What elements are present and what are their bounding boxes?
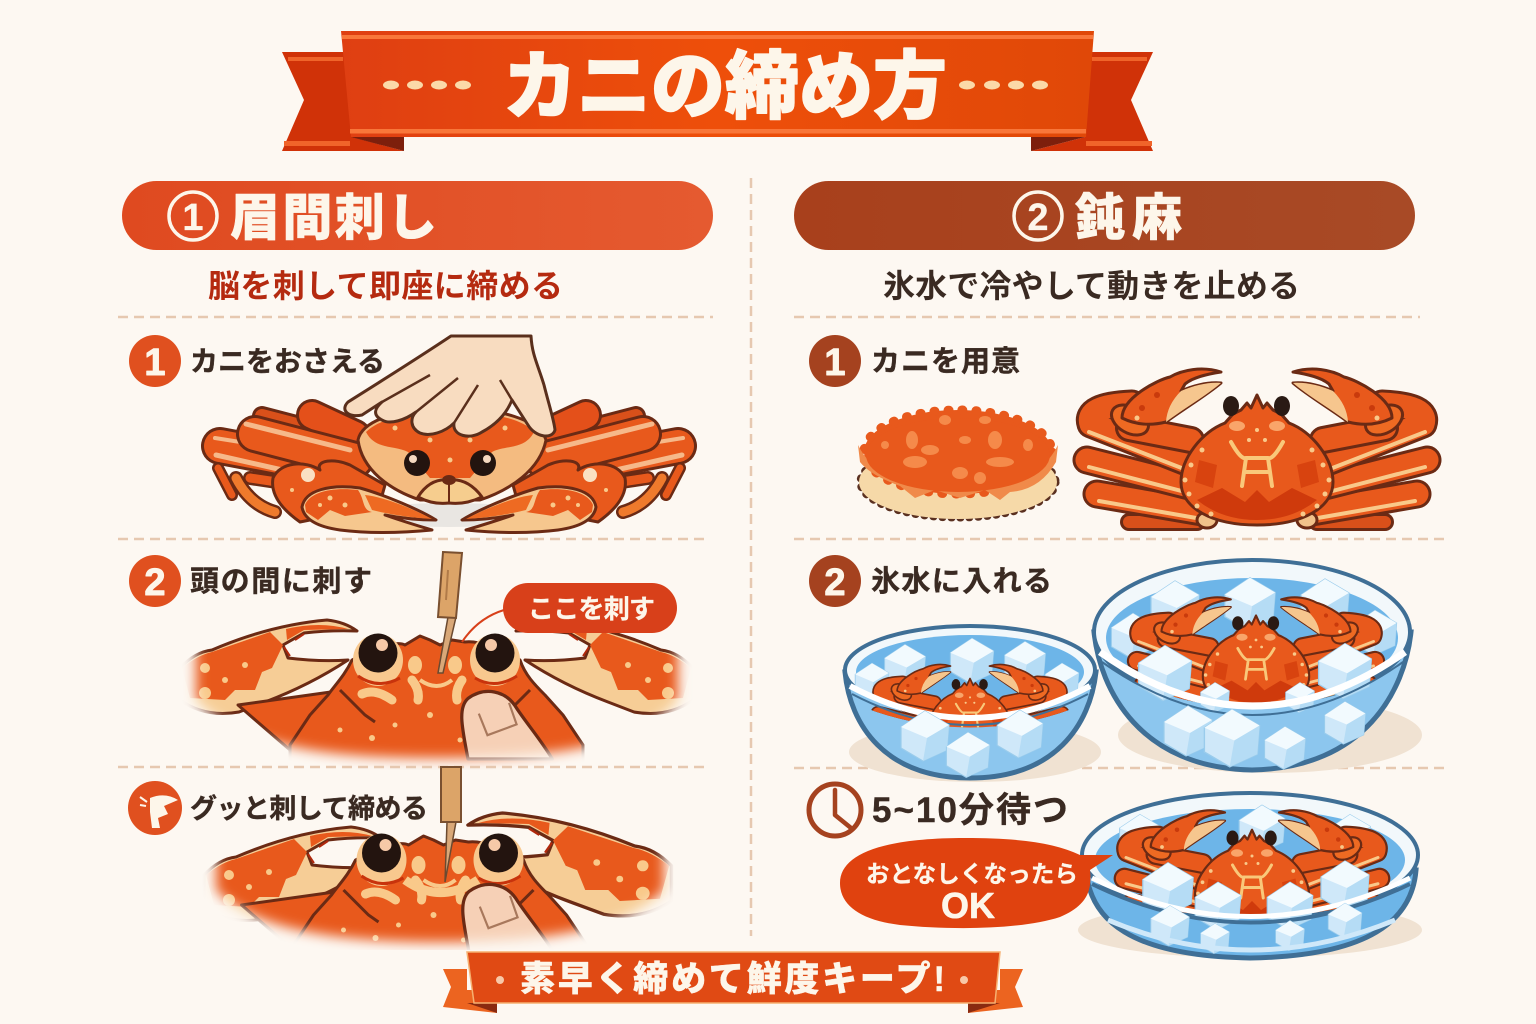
method 2 subtitle: 氷水で冷やして動きを止める: [883, 268, 1300, 304]
callout: おとなしくなったら OK: OK: [941, 885, 995, 926]
illustration: ice dish: [1078, 793, 1422, 958]
title dots left: [383, 80, 471, 90]
ribbon tails: [443, 969, 1023, 1013]
panel: method 2: [794, 181, 1444, 958]
banner left tail: [282, 52, 404, 151]
callout: おとなしくなったら OK: おとなしくなったら: [866, 861, 1078, 887]
illustration: crab with skewer inserted: [204, 767, 672, 970]
title text: カニの締め方: [503, 45, 947, 128]
callout: おとなしくなったら OK: [840, 838, 1113, 928]
step 2 label: 頭の間に刺す: [190, 565, 372, 598]
bottom ribbon: [443, 952, 1023, 1013]
method 2 heading: 鈍麻: [1075, 190, 1182, 246]
step 1 label: [129, 335, 385, 387]
step 1 label: カニをおさえる: [190, 346, 385, 377]
method 1 heading: 眉間刺し: [230, 190, 437, 246]
hand: [345, 336, 555, 436]
step 1 label: カニを用意: [871, 345, 1020, 378]
icon: fist: [150, 795, 178, 828]
step 1 label: 1: [824, 342, 846, 384]
callout: ここを刺す: [503, 583, 677, 633]
method 2 heading: 2: [1027, 197, 1049, 239]
illustration: small ice bowl: [845, 626, 1101, 782]
method 1 subtitle: 脳を刺して即座に締める: [208, 268, 563, 304]
crab shell: [358, 408, 546, 503]
method 1 heading: 1: [182, 197, 204, 239]
illustration: crab shell: [858, 410, 1058, 518]
step 3 label: 5~10分待つ: [872, 791, 1068, 830]
step 2 label: 2: [144, 562, 166, 604]
vertical divider: [750, 178, 752, 936]
title dots right: [959, 80, 1048, 90]
step 3 label: [809, 784, 1068, 836]
banner main ribbon: [341, 31, 1094, 137]
step 3 label: グッと刺して締める: [190, 793, 428, 824]
step 1 label: [809, 335, 1020, 387]
step 2 label: 2: [824, 562, 846, 604]
step 2 label: [809, 555, 1052, 607]
icon: clock: [809, 784, 861, 836]
skewer: [441, 767, 461, 882]
ribbon main: [467, 952, 1000, 1003]
method 1 heading: [122, 181, 713, 250]
illustration: close-up crab with skewer: [180, 552, 693, 770]
crab left half: [215, 415, 436, 532]
title banner: [282, 31, 1153, 151]
banner right tail: [1031, 52, 1153, 151]
panel: method 1: [118, 181, 713, 970]
illustration: large ice bowl: [1094, 560, 1422, 773]
callout line: [462, 610, 504, 642]
step 3 label: [128, 781, 428, 835]
illustration: whole crab: [1087, 369, 1427, 528]
step 1 label: 1: [144, 342, 166, 384]
method 2 heading: [794, 181, 1415, 250]
skewer: [438, 552, 462, 673]
ribbon text: 素早く締めて鮮度キープ!: [520, 960, 945, 999]
illustration: crab held by hand: [215, 336, 683, 532]
step 2 label: 氷水に入れる: [871, 565, 1052, 598]
crab right half: [462, 415, 683, 532]
callout: ここを刺す: ここを刺す: [528, 594, 655, 624]
step 2 label: [129, 555, 372, 607]
